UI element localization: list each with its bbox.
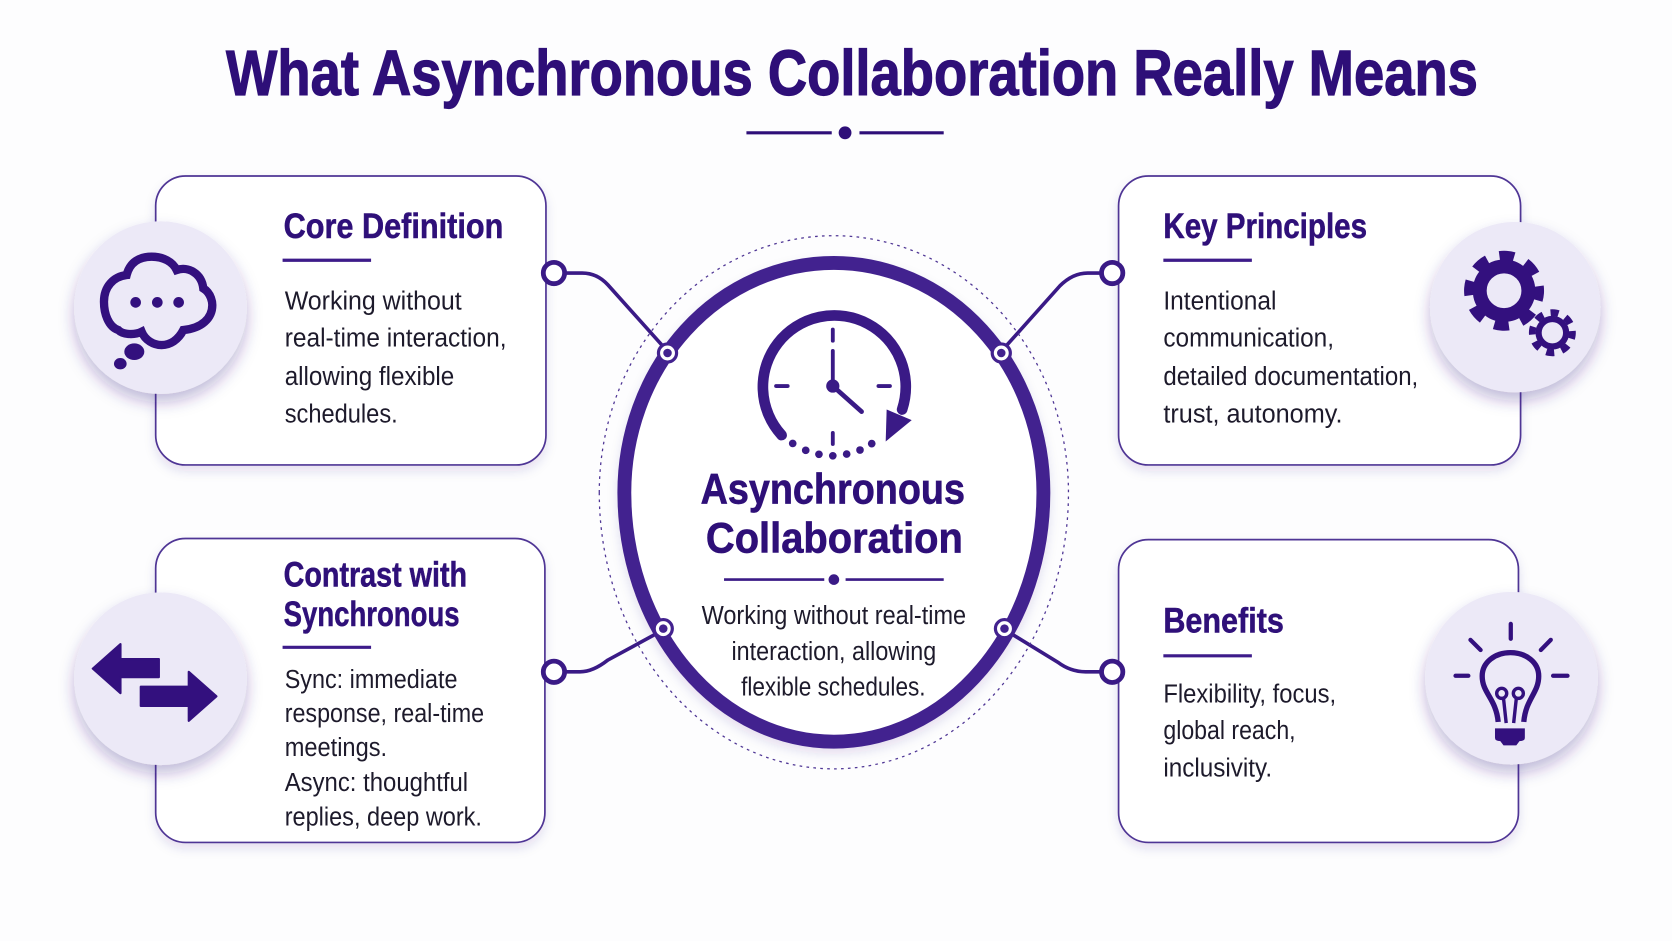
card: contrast xyxy=(156,539,545,842)
body: key principles: Intentional xyxy=(1163,287,1276,315)
center description: Working without real-time xyxy=(702,602,966,630)
body: contrast: Sync: immediate xyxy=(285,666,457,694)
body: benefits: global reach, xyxy=(1163,717,1296,745)
card: core definition xyxy=(156,176,546,465)
main ring xyxy=(624,263,1043,742)
heading: contrast with synchronous: Synchronous xyxy=(284,595,460,634)
icon: thought cloud xyxy=(74,221,247,394)
body: core definition: real-time interaction, xyxy=(285,325,507,353)
body: key principles: detailed documentation, xyxy=(1163,363,1418,391)
heading: key principles: Key Principles xyxy=(1163,207,1367,246)
heading: benefits: Benefits xyxy=(1163,601,1284,640)
connectors xyxy=(565,273,1100,672)
center description: interaction, allowing xyxy=(732,638,936,666)
body: core definition: schedules. xyxy=(285,400,398,428)
card: key principles xyxy=(1119,176,1521,465)
body: contrast: Async: thoughtful xyxy=(285,769,468,797)
heading: contrast with synchronous: Contrast with xyxy=(284,556,467,595)
body: benefits: inclusivity. xyxy=(1163,754,1272,782)
panel: key principles xyxy=(1119,176,1601,465)
body: core definition: Working without xyxy=(285,287,462,315)
body: contrast: meetings. xyxy=(285,734,387,762)
center heading: Asynchronous xyxy=(701,465,965,513)
heading: core definition: Core Definition xyxy=(284,207,503,246)
icon: gears xyxy=(1430,222,1601,392)
body: key principles: communication, xyxy=(1163,325,1334,353)
card connector nodes xyxy=(543,262,1123,682)
center heading: Collaboration xyxy=(706,514,963,562)
panel: benefits xyxy=(1119,540,1598,842)
dotted orbit xyxy=(599,236,1068,769)
icon: clock xyxy=(763,315,912,460)
center divider xyxy=(724,574,944,585)
body: benefits: Flexibility, focus, xyxy=(1163,681,1336,709)
body: contrast: response, real-time xyxy=(285,700,484,728)
panel: core definition xyxy=(74,176,546,465)
body: key principles: trust, autonomy. xyxy=(1163,400,1343,428)
icon: swap arrows xyxy=(74,592,247,765)
panel: contrast with synchronous xyxy=(74,539,545,842)
center description: flexible schedules. xyxy=(741,673,926,701)
title divider xyxy=(746,126,944,139)
body: contrast: replies, deep work. xyxy=(285,803,482,831)
body: core definition: allowing flexible xyxy=(285,363,454,391)
icon: light bulb xyxy=(1425,592,1598,765)
title: What Asynchronous Collaboration Really Means xyxy=(226,37,1478,109)
ring nodes xyxy=(654,344,1014,638)
card: benefits xyxy=(1119,540,1518,842)
center hub xyxy=(599,236,1068,769)
